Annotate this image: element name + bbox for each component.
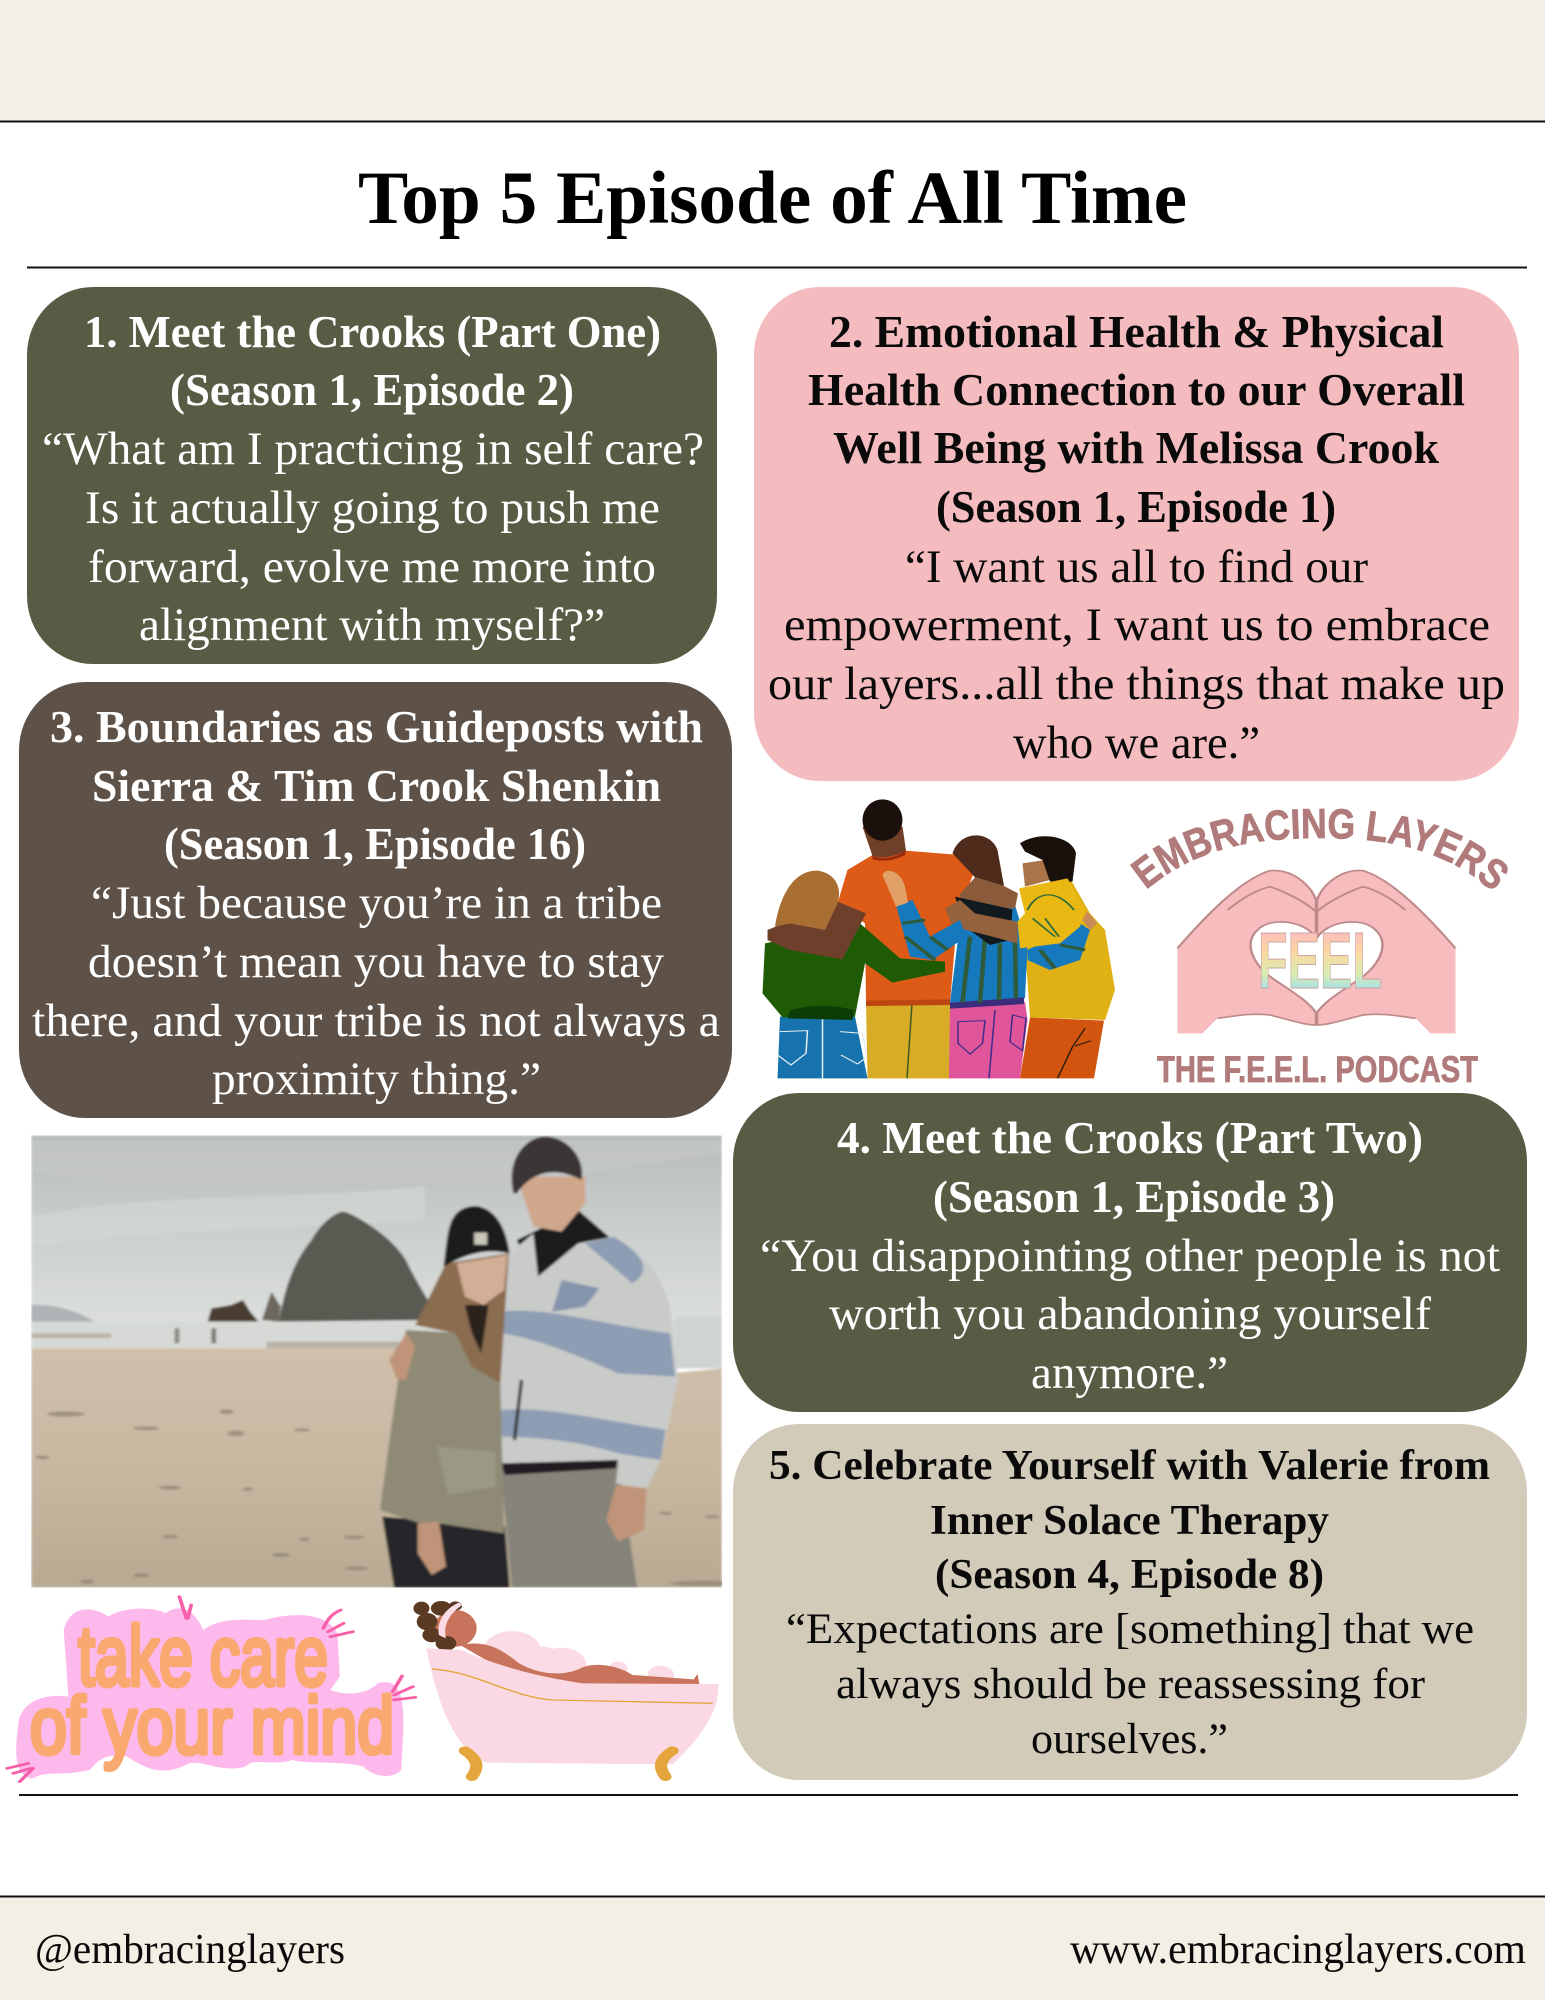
logo arched title — [1146, 838, 1497, 896]
episode 1 heading — [84, 306, 661, 415]
episode 1 quote: alignment with myself?” — [139, 599, 605, 651]
logo heart lettering: FEEL — [1258, 916, 1382, 1005]
episode 2 heading: Health Connection to our Overall — [808, 364, 1465, 415]
footer website: www.embracinglayers.com — [1070, 1927, 1526, 1973]
sticker: take care of your mind: of your mind — [30, 1681, 394, 1770]
episode 2 heading — [808, 306, 1465, 532]
sticker: take care of your mind — [7, 1597, 415, 1782]
episode 5 heading — [769, 1443, 1490, 1598]
panel: episode 2 — [754, 287, 1519, 781]
episode 2 quote — [768, 541, 1505, 769]
episode 1 quote — [42, 423, 704, 651]
man — [500, 1463, 637, 1588]
panel: episode 3 — [19, 682, 732, 1118]
logo: The F.E.E.L. Podcast — [1130, 808, 1508, 1090]
episode 1 quote: “What am I practicing in self care? — [42, 423, 704, 475]
panel: episode 5 — [733, 1424, 1527, 1780]
photo: couple on the beach — [31, 1135, 736, 1588]
logo: The F.E.E.L. Podcast: EMBRACING LAYERS — [1130, 808, 1508, 889]
episode 3 heading — [50, 701, 703, 869]
logo hands forming a heart — [1178, 870, 1456, 1033]
title: Top 5 Episode of All Time — [358, 157, 1187, 240]
panel: episode 1 — [27, 287, 717, 664]
episode 2 quote: empowerment, I want us to embrace — [784, 599, 1490, 651]
episode 3 quote: there, and your tribe is not always a — [32, 995, 720, 1047]
sticker lettering: take care — [78, 1609, 328, 1703]
episode 4 heading: 4. Meet the Crooks (Part Two) — [837, 1112, 1423, 1163]
episode 4 quote: worth you abandoning yourself — [829, 1288, 1431, 1340]
episode 4 quote: anymore.” — [1031, 1347, 1228, 1399]
sticker sparkles — [7, 1597, 415, 1782]
episode 3 heading: Sierra & Tim Crook Shenkin — [92, 760, 661, 811]
illustration: group of friends hugging — [762, 799, 1115, 1078]
episode 1 heading: 1. Meet the Crooks (Part One) — [84, 306, 661, 357]
episode 2 heading: 2. Emotional Health & Physical — [829, 306, 1444, 357]
episode 5 heading: 5. Celebrate Yourself with Valerie from — [769, 1443, 1490, 1489]
episode 3 quote: doesn’t mean you have to stay — [88, 936, 665, 988]
episode 2 quote: “I want us all to find our — [905, 541, 1368, 593]
episode 3 heading: 3. Boundaries as Guideposts with — [50, 701, 703, 752]
episode 4 quote — [760, 1230, 1500, 1399]
footer handle: @embracinglayers — [35, 1927, 345, 1973]
episode 2 quote: our layers...all the things that make up — [768, 658, 1505, 710]
episode 3 quote: proximity thing.” — [212, 1053, 541, 1105]
episode 5 heading: (Season 4, Episode 8) — [935, 1552, 1324, 1598]
episode 5 quote: “Expectations are [something] that we — [786, 1606, 1474, 1653]
illustration: woman in a bathtub — [413, 1601, 718, 1777]
footer band — [0, 1896, 1545, 2000]
panel: episode 4 — [733, 1093, 1527, 1412]
sticker pink blob — [16, 1608, 404, 1778]
episode 3 heading: (Season 1, Episode 16) — [164, 818, 586, 869]
top band — [0, 0, 1545, 121]
episode 5 heading: Inner Solace Therapy — [930, 1498, 1329, 1544]
episode 3 quote — [32, 877, 720, 1105]
woman — [382, 1517, 510, 1588]
episode 2 quote: who we are.” — [1013, 717, 1260, 769]
episode 4 quote: “You disappointing other people is not — [760, 1230, 1500, 1282]
episode 4 heading — [837, 1112, 1423, 1222]
episode 2 heading: Well Being with Melissa Crook — [833, 422, 1439, 473]
episode 5 quote: always should be reassessing for — [836, 1661, 1425, 1708]
episode 3 quote: “Just because you’re in a tribe — [91, 877, 662, 929]
episode 2 heading: (Season 1, Episode 1) — [936, 481, 1336, 532]
episode 1 quote: forward, evolve me more into — [88, 541, 656, 593]
bottom rule — [19, 1794, 1518, 1796]
episode 1 quote: Is it actually going to push me — [85, 482, 660, 534]
episode 5 quote: ourselves.” — [1031, 1716, 1228, 1763]
episode 5 quote — [786, 1606, 1474, 1763]
episode 4 heading: (Season 1, Episode 3) — [933, 1171, 1335, 1222]
episode 1 heading: (Season 1, Episode 2) — [170, 364, 574, 415]
